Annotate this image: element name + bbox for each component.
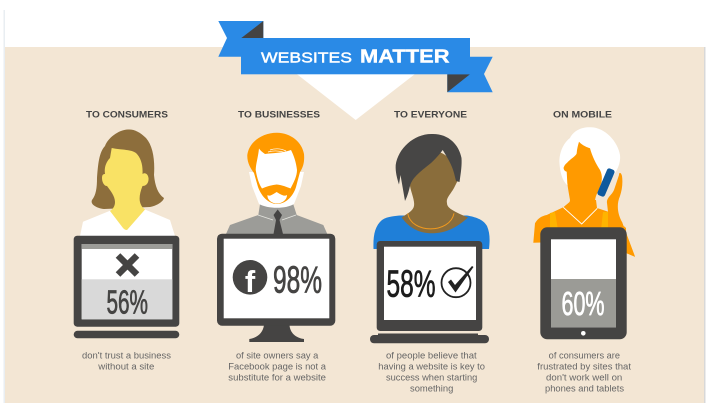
title text: WEBSITES	[261, 50, 352, 66]
stat: 60%	[562, 285, 604, 322]
description: substitute for a website	[228, 373, 326, 383]
stat: 58%	[386, 264, 436, 306]
laptop with 56%	[74, 236, 179, 338]
title text: MATTER	[360, 46, 450, 66]
desktop monitor with 98%	[217, 234, 335, 342]
description: having a website is key to	[378, 361, 485, 371]
column: to consumers	[74, 110, 179, 371]
heading: ON MOBILE	[553, 110, 612, 120]
column: on mobile	[533, 110, 635, 394]
column: to everyone	[370, 110, 490, 394]
icon: facebook: f	[245, 264, 256, 299]
description: don't work well on	[546, 373, 622, 383]
white pointer triangle	[297, 74, 415, 120]
tablet with 60%	[540, 227, 627, 339]
column: to businesses	[217, 110, 335, 383]
heading: TO EVERYONE	[394, 110, 467, 120]
person: woman with dark hair	[373, 134, 490, 249]
description: without a site	[97, 361, 154, 371]
description: of consumers are	[549, 350, 620, 360]
icon: check mark	[442, 266, 474, 297]
description: something	[410, 384, 453, 394]
title banner	[218, 21, 493, 92]
description: Facebook page is not a	[228, 361, 326, 371]
icon: phone	[597, 168, 615, 197]
description: frustrated by sites that	[537, 361, 632, 371]
heading: TO CONSUMERS	[86, 110, 168, 120]
description: of site owners say a	[236, 350, 318, 360]
person: woman with brown hair	[80, 129, 175, 236]
laptop with 58%	[370, 241, 489, 343]
description: success when starting	[386, 373, 477, 383]
description: of people believe that	[386, 350, 477, 360]
description: don't trust a business	[82, 350, 172, 360]
person: man with orange beard	[226, 133, 327, 234]
stat: 98%	[273, 259, 322, 301]
stat: 56%	[106, 283, 148, 320]
heading: TO BUSINESSES	[238, 110, 320, 120]
description: phones and tablets	[545, 384, 625, 394]
person: woman on the phone	[533, 127, 635, 257]
icon: cross	[118, 256, 137, 274]
